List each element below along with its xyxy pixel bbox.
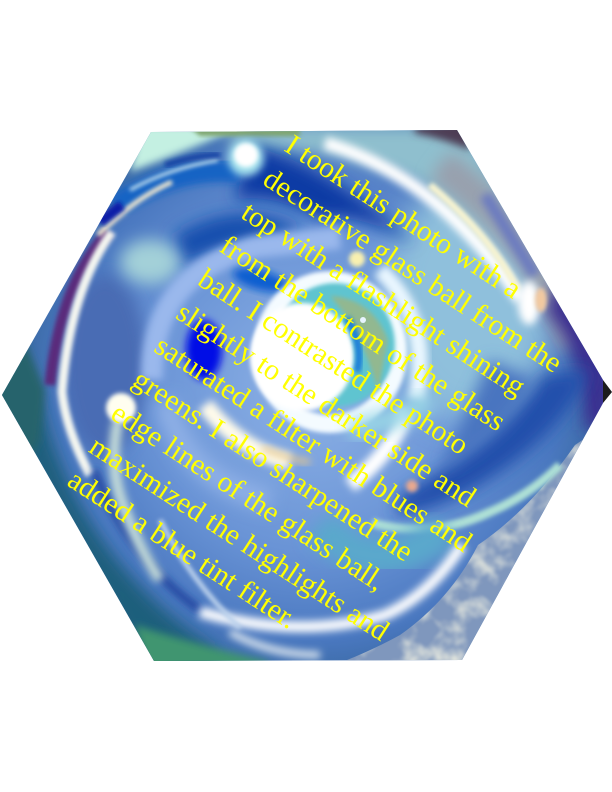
highlight glint at arc end	[518, 281, 540, 325]
rotated yellow caption: maximized the highlights and	[84, 430, 395, 648]
rotated yellow caption: greens. I also sharpened the	[127, 363, 419, 568]
pink dot	[406, 480, 418, 492]
ball highlight left with stalk	[114, 420, 160, 580]
rotated yellow caption: slightly to the darker side and	[171, 296, 482, 514]
lower left teal	[0, 395, 215, 680]
rotated yellow caption: from the bottom of the glass	[214, 229, 511, 438]
central white circle	[250, 303, 354, 411]
top band	[221, 130, 497, 198]
hexagon photo of glass ball	[0, 120, 612, 680]
lavender inner ring	[152, 238, 340, 380]
mottled glass lower right	[347, 440, 583, 660]
lit upper-right bowl	[385, 180, 555, 420]
right grey band	[440, 165, 575, 345]
rotated yellow caption: top with a flashlight shining	[236, 196, 531, 403]
dark blue upper-left bowl	[175, 213, 305, 265]
rotated yellow caption: ball. I contrasted the photo	[192, 263, 474, 462]
top bright arc	[325, 143, 520, 300]
white streak lower center	[350, 410, 406, 485]
pale teal arc	[372, 465, 560, 529]
rotated yellow caption: saturated a filter with blues and	[149, 330, 478, 559]
dark blue under top arc	[235, 145, 415, 245]
white lower arc	[200, 545, 462, 627]
rotated yellow caption: edge lines of the glass ball,	[105, 397, 391, 598]
ball highlight top	[228, 140, 264, 176]
rotated yellow caption: I took this photo with a	[279, 129, 527, 305]
infographic canvas	[2, 130, 612, 661]
rotated yellow caption: decorative glass ball from the	[257, 162, 568, 379]
warm highlight near ring	[349, 251, 365, 267]
left inner bowl	[63, 275, 147, 455]
cyan/olive inner lens	[275, 283, 395, 407]
black corner triangle	[603, 380, 612, 403]
top mint corner	[128, 132, 230, 176]
teal band between arcs	[320, 525, 445, 556]
cream band below center	[205, 405, 290, 462]
central white ring	[262, 280, 398, 424]
lower arc streaks	[230, 632, 320, 655]
right purple edge	[545, 270, 612, 430]
top right dark corner	[415, 122, 470, 150]
rotated yellow caption: added a blue tint filter.	[62, 464, 303, 636]
deep blue patch	[186, 320, 222, 380]
left rim: purple and white	[50, 232, 108, 385]
dark navy lower-right bowl	[395, 370, 590, 515]
